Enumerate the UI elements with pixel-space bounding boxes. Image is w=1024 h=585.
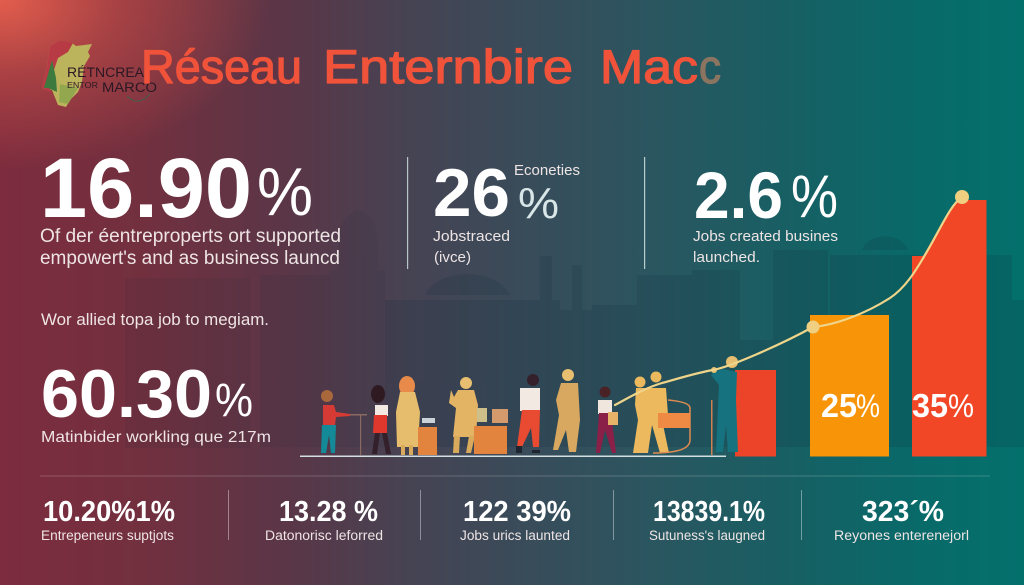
- figure: man in tan suit: [553, 369, 580, 452]
- stat: 26%: Econeties: [514, 163, 580, 179]
- figure: woman with red skirt: [371, 385, 391, 454]
- bottom stat 4: [649, 496, 765, 543]
- stat: 26%: (ivce): [434, 249, 471, 266]
- figures: tan couple: [633, 372, 669, 453]
- stat: 26%: 26: [433, 155, 510, 231]
- stat: 60.30%: %: [215, 373, 253, 426]
- figure: girl at table: [321, 390, 367, 455]
- bottom stat 3: [460, 496, 571, 543]
- icon: small orange box: [418, 418, 437, 455]
- title: c: [699, 40, 721, 93]
- bar: 35%: 35: [912, 387, 948, 424]
- bottom stat 4: 13839.1%: [653, 496, 765, 528]
- people illustration: [321, 356, 738, 455]
- ground line: [300, 456, 726, 457]
- divider: [644, 157, 645, 269]
- stat: 16.90%: empowert's and as business launcd: [40, 248, 340, 269]
- logo: map with wordmark: MARCO: [102, 80, 157, 95]
- bar: 35%: [912, 200, 986, 456]
- stat: 16.90%: %: [257, 154, 313, 230]
- title: Réseau: [141, 40, 302, 93]
- city skyline background: left: [125, 210, 385, 448]
- stat: 2.6%: 2.6: [694, 158, 783, 232]
- figure: man in teal pulling the curve: [711, 356, 738, 455]
- growth curve: [615, 190, 969, 405]
- stat: 26%: Jobstraced: [433, 228, 510, 245]
- bottom stat 3: 122 39%: [463, 496, 571, 528]
- bottom stat 5: Reyones enterenejorl: [834, 528, 969, 543]
- bar: small red: [735, 370, 776, 456]
- city skyline background: centre and right: [385, 236, 1024, 447]
- figure: woman with tan dress: [396, 376, 420, 455]
- divider: [407, 157, 408, 269]
- title: [141, 40, 721, 93]
- stat: 2.6%: [693, 158, 838, 266]
- bottom stat 5: 323´%: [862, 496, 944, 528]
- title: Mac: [600, 40, 698, 93]
- stat: 2.6%: launched.: [693, 249, 760, 266]
- divider: [40, 476, 990, 477]
- bottom stat 2: Datonorisc leforred: [265, 528, 383, 543]
- stat: 26%: %: [518, 179, 559, 228]
- bar: 25%: %: [856, 388, 880, 424]
- text block: job note: Wor allied topa job to megiam.: [41, 311, 269, 329]
- stat: 60.30%: [41, 356, 271, 446]
- bottom stat 5: [834, 496, 969, 543]
- bar: 25%: [810, 315, 889, 456]
- bar: 35%: %: [948, 388, 974, 424]
- bottom stat 1: 10.20%1%: [43, 496, 175, 528]
- logo: map with wordmark: RÉTNCREA: [67, 65, 144, 80]
- logo: map with wordmark: [42, 40, 157, 107]
- logo: map with wordmark: ENTOR: [67, 81, 98, 90]
- icon: orange desk with goods: [474, 408, 508, 454]
- stat: 16.90%: Of der éentreproperts ort supported: [40, 226, 341, 247]
- stat: 60.30%: 60.30: [41, 356, 212, 432]
- stat: 2.6%: %: [791, 163, 838, 230]
- bar: 25%: 25: [821, 387, 857, 424]
- bottom stat 2: 13.28 %: [279, 496, 378, 528]
- bottom stat 1: [41, 496, 175, 543]
- stat: 16.90%: [40, 141, 341, 269]
- figure: girl with bag: [596, 386, 618, 453]
- bottom stat 3: Jobs urics launted: [460, 528, 570, 543]
- bar chart: [735, 200, 986, 456]
- stat: 60.30%: Matinbider workling que 217m: [41, 429, 271, 446]
- icon: suitcase: [653, 400, 690, 453]
- figure: man in tan coat: [449, 377, 478, 453]
- stat: 2.6%: Jobs created busines: [693, 228, 838, 245]
- stat: 16.90%: 16.90: [40, 141, 252, 235]
- figure: man with red trousers: [516, 374, 540, 453]
- bottom stat 2: [265, 496, 383, 543]
- bottom stat 1: Entrepeneurs suptjots: [41, 528, 174, 543]
- stat: 26%: [433, 155, 580, 266]
- bottom stat 4: Sutuness's laugned: [649, 528, 765, 543]
- title: Enternbire: [323, 40, 573, 93]
